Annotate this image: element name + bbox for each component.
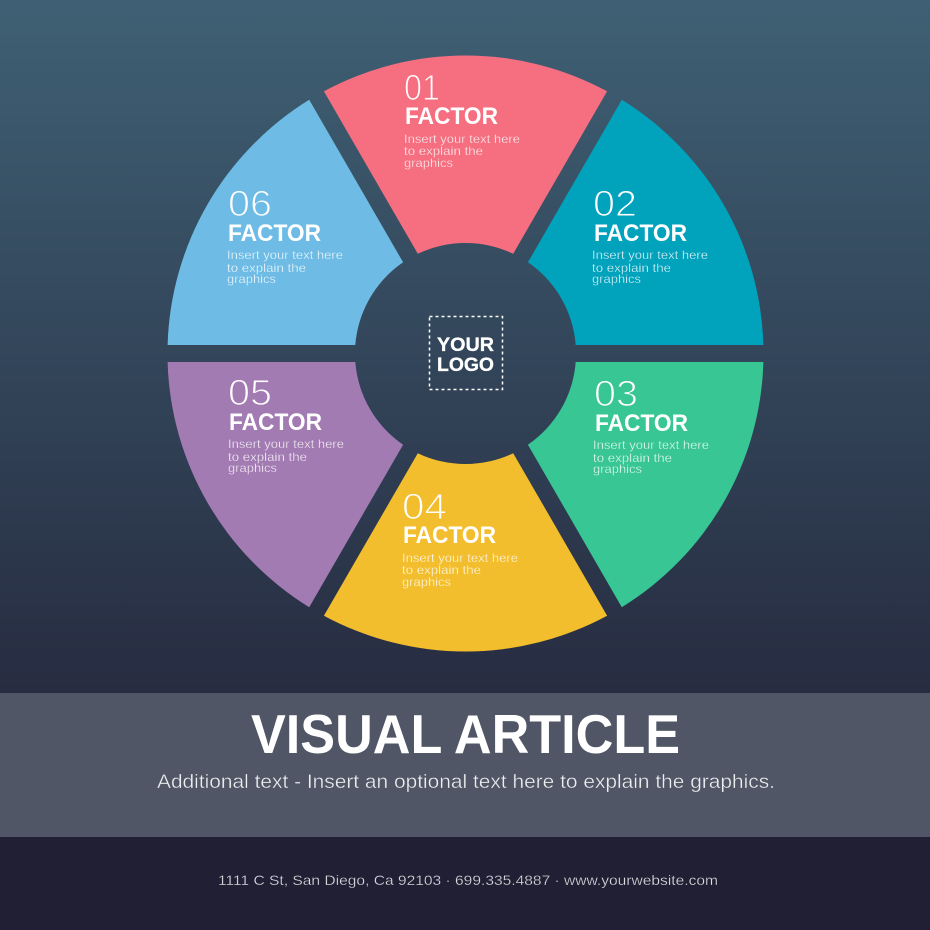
segment 03: FACTOR (595, 410, 688, 437)
segment 03: Insert your text here (593, 438, 709, 452)
segment 01: to explain the (404, 144, 483, 158)
segment 06 (168, 100, 403, 345)
contact details: 1111 C St, San Diego, Ca 92103 · 699.335.4887 · www.yourwebsite.com (218, 872, 718, 888)
title: VISUAL ARTICLE (251, 703, 680, 765)
subtitle: Additional text - Insert an optional text here to explain the graphics. (157, 771, 775, 793)
footer (0, 837, 930, 930)
segment 05: Insert your text here (228, 437, 344, 451)
segment 03 (528, 362, 763, 607)
segment 05 (168, 362, 403, 607)
segment 04: to explain the (402, 563, 481, 577)
segment 01: Insert your text here (404, 132, 520, 146)
segment 06: 06 (228, 183, 272, 224)
segment 01 (324, 56, 607, 254)
segment wheel (168, 56, 763, 651)
segment 05: FACTOR (229, 409, 322, 436)
logo placeholder: LOGO (437, 354, 494, 376)
segment 06: FACTOR (228, 220, 321, 247)
segment 02: FACTOR (594, 220, 687, 247)
segment 04: 04 (402, 486, 447, 527)
segment 03: to explain the (593, 451, 672, 465)
segment 06: graphics (227, 272, 276, 286)
title panel (0, 693, 930, 837)
segment 03: graphics (593, 462, 642, 476)
segment 02 (528, 100, 763, 345)
segment 02: graphics (592, 272, 641, 286)
segment 05: 05 (228, 372, 272, 413)
segment 05: to explain the (228, 450, 307, 464)
segment 02: Insert your text here (592, 248, 708, 262)
segment 01: 01 (404, 67, 440, 108)
logo placeholder (430, 316, 502, 390)
segment 02: to explain the (592, 261, 671, 275)
segment 04: FACTOR (403, 522, 496, 549)
segment 01: FACTOR (405, 103, 498, 130)
segment 05: graphics (228, 461, 277, 475)
logo placeholder: YOUR (437, 334, 494, 356)
background (0, 0, 930, 693)
segment 04: graphics (402, 575, 451, 589)
segment 04: Insert your text here (402, 551, 518, 565)
segment 04 (324, 453, 607, 651)
segment 06: to explain the (227, 261, 306, 275)
segment 01: graphics (404, 156, 453, 170)
segment 06: Insert your text here (227, 248, 343, 262)
segment 02: 02 (593, 183, 637, 224)
segment 03: 03 (594, 373, 638, 414)
